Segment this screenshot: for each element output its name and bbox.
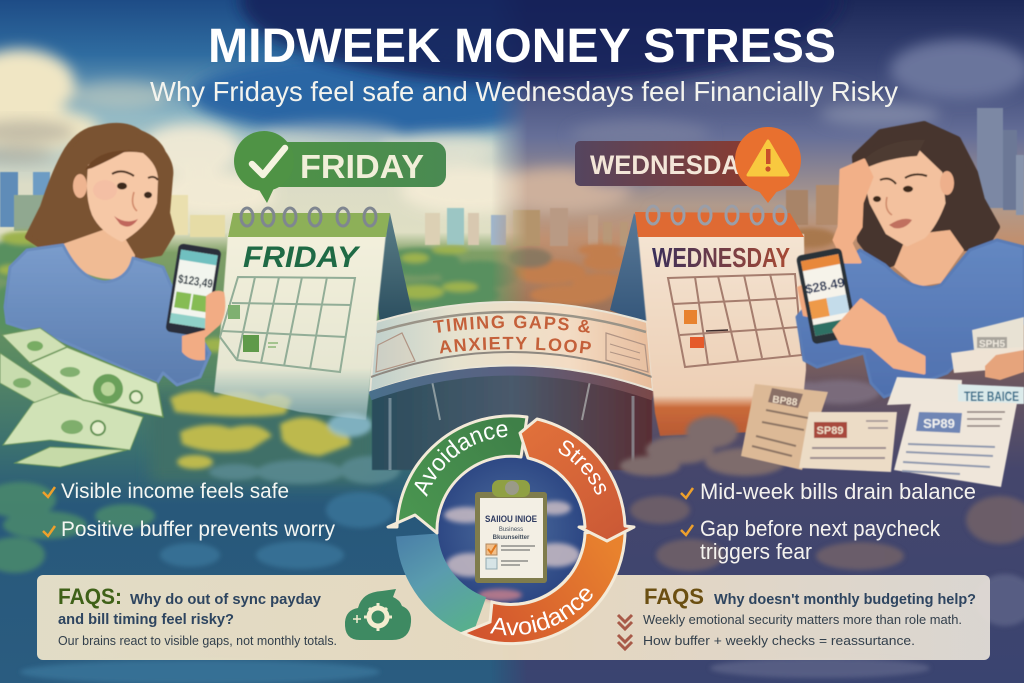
right answer 2: How buffer + weekly checks = reassurtance. [643,634,915,648]
calendar rings [647,206,786,224]
phone: right [796,247,858,345]
top navy glow [240,0,840,85]
clipboard title: SAIIOU INIOE [485,514,537,524]
calendar rings [241,208,376,226]
bullet check 2 [43,526,55,536]
clipboard subtitle 2: Bkuunseitter [493,535,530,541]
right check 2 [618,635,632,649]
icon: warning [748,141,788,175]
right check 1 [618,615,632,629]
left FAQ question continued: and bill timing feel risky? [58,611,234,628]
paper 3: SP89 [923,416,955,431]
paper 5: SPH5 [979,339,1005,350]
right FAQ label: FAQS [644,584,704,609]
ring label: Avoidance: Avoidance [414,424,508,497]
Friday calendar [214,208,390,420]
paper 3 [894,400,1017,487]
Wednesday tag text: WEDNESDA [590,150,740,180]
ring segment: teal money [417,535,479,617]
left woman with phone [5,126,225,385]
paper 1 [741,384,828,470]
bridge text line 2: ANXIETY LOOP [440,336,591,354]
forest right [508,228,1024,678]
Friday tag text: FRIDAY [300,148,424,185]
bullet check 1 [681,488,693,498]
bullet text 2 continued: triggers fear [700,539,812,564]
ring label: Stress: Stress [558,440,606,495]
FAQ panel [37,575,990,660]
phone balance: $28.49 [804,275,846,297]
calendar back panels [372,213,650,325]
money bills [0,328,163,467]
bridge text line 1 [432,316,590,333]
paper 1: BP88 [772,394,798,409]
bullet text 2: Positive buffer prevents worry [61,518,335,541]
bills and papers [741,317,1024,487]
right FAQ question: Why doesn't monthly budgeting help? [714,591,976,608]
calendar heading: WEDNESDAY [652,242,790,273]
paper 2: SP89 [817,425,843,437]
inner clouds [444,501,580,601]
calendar grid [220,277,355,372]
bullet check 2 [681,525,693,535]
subtitle: Why Fridays feel safe and Wednesdays feel Financially Risky [150,76,898,107]
phone balance: $123,49 [177,272,214,291]
timing gaps bridge banner [330,301,654,470]
bridge rim [370,371,653,396]
bullet check 1 [43,487,55,497]
ring label: Stress [558,440,606,495]
Wednesday calendar [635,206,806,436]
icon: check [252,148,285,175]
right hand [985,350,1024,380]
left FAQ question: Why do out of sync payday [130,591,322,608]
bullets: Friday [43,480,335,541]
left FAQ answer: Our brains react to visible gaps, not monthly totals. [58,634,337,648]
background: right risky scene [494,0,1024,683]
paper behind [887,377,962,405]
bullets: Wednesday [681,479,976,564]
forest left [0,231,520,683]
clipboard [475,480,547,583]
title: MIDWEEK MONEY STRESS [208,20,836,73]
left FAQ label: FAQS: [58,584,122,609]
clipboard subtitle: Business [499,527,523,533]
paper 4 [951,343,1024,373]
phone: left [165,243,222,338]
skyline right [513,108,1024,246]
paper 5 [972,317,1024,350]
ring segment: green [388,416,527,533]
Wednesday tag [575,127,801,203]
anxiety cycle ring [386,414,636,645]
storm clouds at calendar base [620,416,785,476]
right answer 1: Weekly emotional security matters more than role math. [643,613,962,627]
skyline left [0,172,506,245]
ring segment: lower orange [463,526,625,644]
ring segment: orange stress [520,419,634,541]
bridge text line 1: TIMING GAPS & [432,316,590,333]
icon: green cloud with gear [345,589,411,640]
paper 2 [799,412,897,472]
right woman with phone [796,125,1024,397]
calendar grid [668,274,802,367]
Friday tag [234,131,446,203]
bullet text 1: Visible income feels safe [61,480,289,503]
bridge text line 2 [396,301,636,390]
bullet text 2: Gap before next paycheck [700,516,941,541]
calendar heading: FRIDAY [243,241,361,274]
ring label: Avoidance bottom: Avoidance [490,588,593,636]
bullet text 1: Mid-week bills drain balance [700,479,976,504]
